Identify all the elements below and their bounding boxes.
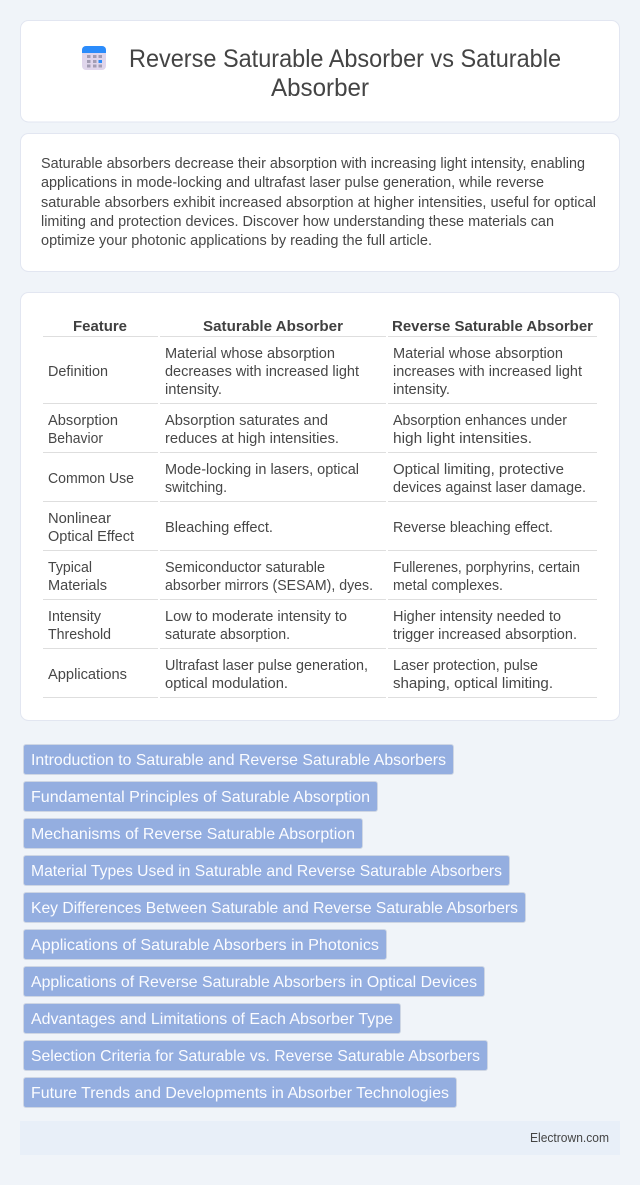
row: intensity threshold — [43, 609, 597, 649]
title — [129, 46, 561, 102]
row: typical materials: Semiconductor saturable — [165, 560, 325, 576]
row: absorption behavior: Absorption — [48, 413, 118, 429]
row: intensity threshold: trigger increased absorption. — [393, 627, 577, 643]
link 2: Fundamental Principles of Saturable Absorption — [31, 789, 370, 806]
link 8 — [24, 1004, 400, 1034]
row: nonlinear optical effect: Bleaching effect. — [165, 520, 273, 536]
row: definition: Material whose absorption — [165, 346, 335, 362]
row: intensity threshold: Threshold — [48, 627, 111, 643]
panel: title header — [20, 20, 620, 122]
link 5 — [24, 892, 526, 922]
table header: Feature — [73, 318, 127, 335]
link 8: Advantages and Limitations of Each Absorber Type — [31, 1011, 393, 1028]
table header — [43, 318, 597, 337]
link 2 — [24, 782, 378, 812]
row: typical materials: Fullerenes, porphyrins, certain — [393, 560, 580, 576]
row: absorption behavior — [43, 413, 597, 453]
row: common use: Optical limiting, protective — [393, 462, 564, 478]
row: typical materials: Typical — [48, 560, 92, 576]
row: intensity threshold: Low to moderate intensity to — [165, 609, 347, 625]
footer: Electrown.com — [530, 1130, 609, 1145]
link 3: Mechanisms of Reverse Saturable Absorption — [31, 826, 355, 843]
table of contents links — [24, 744, 526, 1108]
intro text: optimize your photonic applications by reading the full article. — [41, 233, 432, 249]
row: definition — [43, 346, 597, 404]
link 1: Introduction to Saturable and Reverse Saturable Absorbers — [31, 752, 446, 769]
row: absorption behavior: reduces at high intensities. — [165, 431, 339, 447]
row: typical materials — [43, 560, 597, 600]
row: nonlinear optical effect: Reverse bleaching effect. — [393, 520, 553, 536]
row: typical materials: metal complexes. — [393, 578, 503, 594]
row: absorption behavior: Absorption enhances under — [393, 413, 567, 429]
link 10: Future Trends and Developments in Absorber Technologies — [31, 1085, 449, 1102]
row: common use — [43, 462, 597, 502]
table header: Saturable Absorber — [203, 318, 343, 335]
link 7: Applications of Reverse Saturable Absorbers in Optical Devices — [31, 974, 477, 991]
row: nonlinear optical effect: Optical Effect — [48, 529, 134, 545]
link 1 — [24, 744, 454, 774]
row: definition: increases with increased light — [393, 364, 582, 380]
row: intensity threshold: saturate absorption. — [165, 627, 290, 643]
row: nonlinear optical effect — [43, 511, 597, 551]
link 9 — [24, 1040, 488, 1070]
row: applications — [43, 658, 597, 698]
row: intensity threshold: Intensity — [48, 609, 102, 625]
link 4 — [24, 856, 510, 886]
intro text: applications in mode-locking and ultrafast laser pulse generation, while reverse — [41, 175, 544, 191]
link 4: Material Types Used in Saturable and Reverse Saturable Absorbers — [31, 863, 502, 880]
row: absorption behavior: Behavior — [48, 431, 103, 447]
link 10 — [24, 1078, 456, 1108]
panel: introduction — [20, 134, 620, 272]
footer — [20, 1121, 620, 1155]
row: common use: Mode-locking in lasers, optical — [165, 462, 359, 478]
row: applications: shaping, optical limiting. — [393, 676, 553, 692]
icon: calendar — [82, 46, 106, 70]
panel: comparison table — [20, 292, 620, 720]
intro text: limiting and protection devices. Discover how understanding these materials can — [41, 214, 554, 230]
link 3 — [24, 818, 362, 848]
row: absorption behavior: Absorption saturates and — [165, 413, 328, 429]
row: definition: decreases with increased light — [165, 364, 359, 380]
row: definition: Definition — [48, 364, 108, 380]
row: common use: switching. — [165, 480, 227, 496]
row: absorption behavior: high light intensities. — [393, 431, 532, 447]
row: applications: Laser protection, pulse — [393, 658, 538, 674]
row: typical materials: Materials — [48, 578, 107, 594]
row: nonlinear optical effect: Nonlinear — [48, 511, 111, 527]
intro text: Saturable absorbers decrease their absorption with increasing light intensity, enabling — [41, 156, 585, 172]
title: Absorber — [271, 75, 369, 102]
link 7 — [24, 966, 484, 996]
link 5: Key Differences Between Saturable and Reverse Saturable Absorbers — [31, 900, 518, 917]
row: applications: optical modulation. — [165, 676, 288, 692]
link 6: Applications of Saturable Absorbers in Photonics — [31, 937, 379, 954]
row: applications: Applications — [48, 667, 127, 683]
intro text: saturable absorbers exhibit increased absorption at higher intensities, useful for optical — [41, 195, 596, 211]
row: applications: Ultrafast laser pulse generation, — [165, 658, 368, 674]
link 6 — [24, 930, 386, 960]
table header: Reverse Saturable Absorber — [392, 318, 593, 335]
row: definition: intensity. — [165, 382, 222, 398]
row: definition: Material whose absorption — [393, 346, 563, 362]
title: Reverse Saturable Absorber vs Saturable — [129, 46, 561, 73]
row: typical materials: absorber mirrors (SESAM), dyes. — [165, 578, 373, 594]
row: intensity threshold: Higher intensity needed to — [393, 609, 561, 625]
row: definition: intensity. — [393, 382, 450, 398]
intro text — [41, 156, 596, 249]
row: common use: Common Use — [48, 471, 134, 487]
link 9: Selection Criteria for Saturable vs. Reverse Saturable Absorbers — [31, 1048, 480, 1065]
row: common use: devices against laser damage. — [393, 480, 586, 496]
